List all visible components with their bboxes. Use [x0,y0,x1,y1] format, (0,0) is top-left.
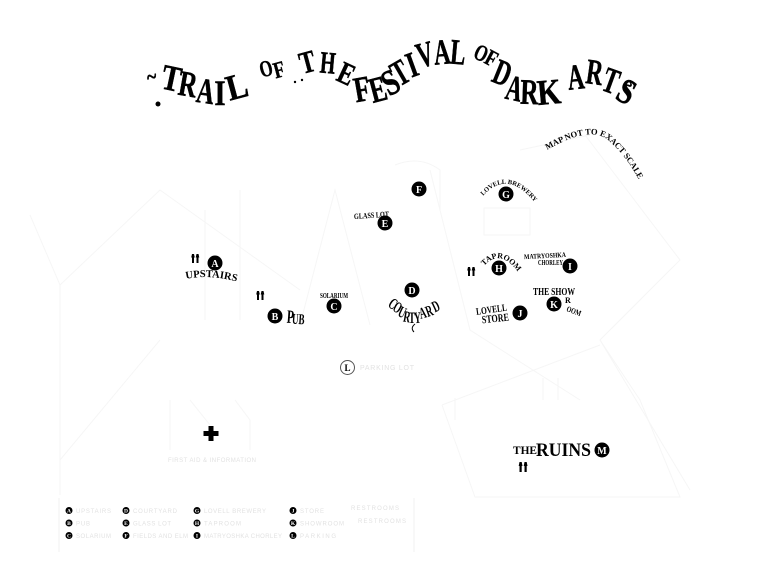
title: V [412,33,438,76]
title: O [257,55,276,83]
location B: Pub: B [272,312,279,323]
location D: Courtyard: U [395,302,410,322]
title: A [502,68,527,110]
legend labels: TAPROOM [204,522,241,528]
title: S [374,61,407,104]
location I: Matryoshka Chorley: CHORLEY [538,259,563,267]
location J: Lovell Store: J [518,309,522,320]
location E: Glass Lot: E [382,219,389,230]
location G: Lovell Brewery: G [502,190,510,201]
legend labels: SOLARIUM [76,534,111,540]
legend markers: A [67,508,71,514]
location K: The Show Room: OOM [565,304,583,318]
location D: Courtyard: Y [413,308,422,327]
title: F [480,44,503,73]
title: T [383,51,417,94]
title: A [432,31,452,73]
title: ~ [145,62,159,90]
title: T [158,58,185,101]
location F: F [416,185,422,196]
title: F [270,55,288,84]
legend markers [66,507,296,540]
location H: Taproom: H [495,264,503,275]
location C: Solarium: C [330,302,338,313]
legend markers: L [291,534,295,540]
location M: The Ruins: M [597,446,607,457]
location D: Courtyard [385,282,443,332]
restroom icon A [191,254,199,263]
location E: Glass Lot: GLASS LOT [354,210,390,221]
legend markers: H [195,521,200,527]
title: O [470,40,492,68]
location M: The Ruins: THE [513,443,537,457]
location J: Lovell Store: LOVELL [475,303,508,318]
location K: The Show Room: R [565,296,571,305]
title: K [535,72,563,114]
location K: The Show Room [533,286,583,318]
location K: The Show Room: K [550,300,558,311]
legend labels: RESTROOMS [351,506,399,512]
location D: Courtyard: D [408,286,416,297]
location J: Lovell Store: STORE [481,312,509,326]
legend labels [76,506,406,540]
location A: Upstairs: A [211,259,219,270]
title: ~ [619,73,639,99]
legend labels: MATRYOSHKA CHORLEY [204,534,282,540]
restroom icon B [256,291,264,300]
first aid cross: FIRST AID & INFORMATION [168,458,256,464]
location B: Pub: UB [292,310,305,328]
legend labels: STORE [300,509,324,515]
title: R [176,62,201,106]
legend markers: J [292,508,295,514]
legend markers: G [195,508,200,514]
location K: The Show Room: THE SHOW [533,286,575,298]
title: S [610,71,643,114]
location A: Upstairs: UPSTAIRS [185,270,238,281]
legend markers: K [291,521,296,527]
location E: Glass Lot [354,210,392,230]
location D: Courtyard: D [429,296,443,316]
location B: Pub: P [286,307,295,328]
title: E [332,55,361,92]
location L [340,360,415,374]
title: E [364,67,391,111]
location H: Taproom: TAPROOM [480,252,522,272]
legend markers: C [67,534,71,540]
location M: The Ruins: RUINS [536,440,591,461]
location G: Lovell Brewery: LOVELL BREWERY [480,180,538,202]
title: R [520,71,540,112]
legend markers: D [124,508,128,514]
location I: Matryoshka Chorley [524,251,578,274]
legend [59,498,414,552]
legend labels: SHOWROOM [300,522,344,528]
location J: Lovell Store [475,303,528,326]
restroom icon H [467,267,475,276]
title: L [222,66,252,109]
location D: Courtyard: T [409,308,415,327]
title: A [194,71,217,112]
title: R [584,51,607,94]
location D: Courtyard: R [402,307,412,326]
title: A [565,56,586,98]
restroom icon M [519,462,528,472]
location L: L [344,363,351,373]
location I: Matryoshka Chorley: I [568,262,572,273]
legend labels: COURTYARD [133,509,178,515]
title: L [449,31,467,73]
location A: Upstairs [185,256,238,281]
legend labels: RESTROOMS [358,519,406,525]
title: T [295,44,319,81]
title: D [487,51,518,95]
legend labels: PUB [76,522,90,528]
title: I [400,44,423,85]
legend labels: FIELDS AND ELM [133,534,188,540]
title [145,31,643,114]
location M: The Ruins [513,440,610,461]
title: T [597,59,625,102]
title: I [214,74,226,114]
legend labels: GLASS LOT [133,522,171,528]
location D: Courtyard: R [423,301,436,321]
title: F [350,68,373,110]
legend markers: B [67,521,71,527]
location C: Solarium: SOLARIUM [320,292,348,300]
legend markers: F [124,534,128,540]
title: H [319,45,337,81]
location D: Courtyard: C [385,294,401,313]
location B: Pub [268,307,305,328]
location I: Matryoshka Chorley: MATRYOSHKA [524,251,566,261]
location D: Courtyard: A [417,303,429,322]
location C: Solarium [320,292,348,314]
scale note: MAP NOT TO EXACT SCALE [544,128,644,179]
background building outlines [30,135,690,497]
legend markers: E [124,521,128,527]
legend labels: LOVELL BREWERY [204,509,266,515]
location D: Courtyard: O [390,298,406,317]
legend labels: PARKING [300,534,336,540]
location F [412,182,426,196]
location L: PARKING LOT [360,365,415,372]
legend labels: UPSTAIRS [76,509,111,515]
first aid cross [168,426,256,464]
legend markers: I [196,534,198,540]
